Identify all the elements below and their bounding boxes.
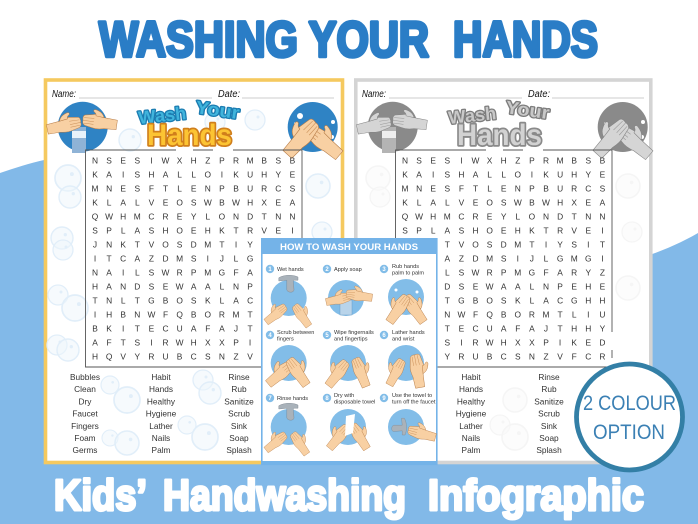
panel: how to wash your hands <box>261 238 438 465</box>
grey name and date line <box>362 89 644 100</box>
step 4: scrub between fingers: Scrub between <box>277 330 314 336</box>
grey word list: Splash <box>536 445 562 455</box>
word search letters: SPLASHOEHKTRVEI <box>92 226 294 236</box>
logo: wash your hands <box>137 97 241 152</box>
word list: Scrub <box>228 409 250 419</box>
word search letters: AFTSIRWHXXPIKED <box>92 338 295 348</box>
grey word search letters: MNESFTLENPBURCS <box>402 184 606 194</box>
grey logo: wash your hands <box>447 97 551 152</box>
step 1: wet hands: 1 <box>268 267 272 273</box>
grey icon: hands with soap cup <box>355 102 428 153</box>
word search letters: JNKTVOSDMTIYSIT <box>93 240 295 250</box>
step 5: wipe fingernails and fingertips: Wipe fingernails <box>334 330 374 336</box>
word search letters: IHBNWFQBORMTLIU <box>94 310 295 320</box>
step 4: scrub between fingers <box>261 330 316 389</box>
grey icon: hands rubbing <box>586 102 659 161</box>
grey word search letters: IHBNWFQBORMTLIU <box>404 310 605 320</box>
word search letters: MNESFTLENPBURCS <box>92 184 296 194</box>
step 9: use the towel to turn off the faucet: 9 <box>382 396 386 402</box>
grey word search letters: HQVYRUBCSNZVFCR <box>402 352 605 362</box>
background bubbles <box>47 110 332 455</box>
title: WASHING YOUR <box>99 12 429 68</box>
word search frame <box>86 150 302 367</box>
grey word list: Habit <box>461 372 481 382</box>
step 4: scrub between fingers: 4 <box>268 333 272 339</box>
icon: hands with soap cup <box>45 102 118 153</box>
step 3: rub hands palm to palm: Rub hands <box>392 264 419 270</box>
word list: Nails <box>152 433 170 443</box>
word search letters: QWHMCREYLONDTNN <box>92 212 295 222</box>
word search letters: BKITECUAFAJTHHY <box>92 324 296 334</box>
step 3: rub hands palm to palm: palm to palm <box>392 270 424 276</box>
step 3: rub hands palm to palm: 3 <box>382 267 386 273</box>
word search letters: NSESIWXHZPRMBSB <box>92 156 296 166</box>
grey word search letters: NAILSWRPMGFARYZ <box>402 268 605 278</box>
grey word search letters: TNLTGBOSKLACGHH <box>402 296 605 306</box>
grey word search letters: HANDSEWAALNPEHE <box>402 282 606 292</box>
panel: greyscale word search <box>355 80 659 462</box>
callout: 2 colour option: OPTION <box>593 421 665 444</box>
word search letters: NAILSWRPMGFARYZ <box>92 268 295 278</box>
grey word search letters <box>402 156 606 362</box>
word search letters: KAISHALLOIKUHYE <box>92 170 296 180</box>
grey word list: Rub <box>541 384 557 394</box>
grey word list: Healthy <box>457 396 486 406</box>
step 8: dry with disposable towel: disposable towel <box>334 400 375 406</box>
grey word search letters: JNKTVOSDMTIYSIT <box>403 240 605 250</box>
word list: Faucet <box>72 409 98 419</box>
step 3: rub hands palm to palm <box>380 264 433 326</box>
grey word search letters: KAISHALLOIKUHYE <box>402 170 606 180</box>
word list: Lather <box>149 421 173 431</box>
word list: Rinse <box>228 372 250 382</box>
grey word search letters: NSESIWXHZPRMBSB <box>402 156 606 166</box>
grey logo: wash your hands: Your <box>504 97 551 123</box>
word list: Hygiene <box>146 409 177 419</box>
word list: Foam <box>74 433 96 443</box>
grey word list: Nails <box>462 433 480 443</box>
step 8: dry with disposable towel: 8 <box>325 396 329 402</box>
grey word search letters: QWHMCREYLONDTNN <box>402 212 605 222</box>
step 4: scrub between fingers: fingers <box>277 336 294 342</box>
step 6: lather hands and wrist <box>380 330 432 389</box>
grey word list: Palm <box>462 445 481 455</box>
word list: Habit <box>151 372 171 382</box>
grey logo: wash your hands: Wash <box>447 103 497 128</box>
step 6: lather hands and wrist: 6 <box>382 333 386 339</box>
step 6: lather hands and wrist: and wrist <box>392 336 415 342</box>
step 9: use the towel to turn off the faucet: Use the towel to <box>392 393 432 399</box>
grey word list: Sanitize <box>534 396 564 406</box>
name and date line: Date: <box>218 89 240 100</box>
word list: Dry <box>79 396 92 406</box>
logo: wash your hands: Your <box>194 97 241 123</box>
word search letters: HANDSEWAALNPEHE <box>92 282 296 292</box>
step 6: lather hands and wrist: Lather hands <box>392 330 425 336</box>
logo: wash your hands: Wash <box>137 103 187 128</box>
word search letters: KLALVEOSWBWHXEA <box>92 198 296 208</box>
grey name and date line: Name: <box>362 89 386 100</box>
grey word search letters: AFTSIRWHXXPIKED <box>402 338 605 348</box>
step 2: apply soap: Apply soap <box>334 267 362 273</box>
grey word list: Soap <box>539 433 559 443</box>
word list: Germs <box>73 445 97 455</box>
background blue wave <box>0 157 698 524</box>
step 2: apply soap: 2 <box>325 267 329 273</box>
step 1: wet hands: Wet hands <box>277 267 304 273</box>
step 7: rinse hands: 7 <box>268 396 272 402</box>
word search letters: HQVYRUBCSNZVFCR <box>92 352 295 362</box>
word list: Healthy <box>147 396 176 406</box>
step 9: use the towel to turn off the faucet <box>380 393 438 445</box>
step 5: wipe fingernails and fingertips: and fingertips <box>334 336 368 342</box>
step 5: wipe fingernails and fingertips: 5 <box>325 333 329 339</box>
grey logo: wash your hands: Hands <box>457 119 542 152</box>
word list: Hands <box>149 384 173 394</box>
grey word search frame <box>396 150 612 367</box>
step 9: use the towel to turn off the faucet: turn off the faucet <box>392 400 436 406</box>
bottom title: Infographic <box>428 471 644 520</box>
bottom title: Handwashing <box>163 471 406 520</box>
word list: Clean <box>74 384 96 394</box>
bottom title: Kids’ <box>54 471 147 520</box>
callout: 2 colour option <box>576 364 682 470</box>
step 8: dry with disposable towel: Dry with <box>334 393 354 399</box>
grey word list: Sink <box>541 421 558 431</box>
word list: Sanitize <box>224 396 254 406</box>
word search letters <box>92 156 296 362</box>
step 1: wet hands <box>261 265 316 329</box>
word list: Rub <box>231 384 247 394</box>
word list: Bubbles <box>70 372 100 382</box>
grey word list: Lather <box>459 421 483 431</box>
step 2: apply soap <box>323 265 373 316</box>
grey background bubbles <box>366 166 642 450</box>
word list: Sink <box>231 421 248 431</box>
name and date line: Name: <box>52 89 76 100</box>
grey word search letters: ITCAZDMSIJLGMGI <box>404 254 604 264</box>
word list <box>70 372 254 455</box>
grey word list <box>456 372 564 455</box>
grey word search letters: BKITECUAFAJTHHY <box>402 324 606 334</box>
title: HANDS <box>453 12 598 68</box>
step 7: rinse hands <box>261 394 314 457</box>
name and date line <box>52 89 334 100</box>
logo: wash your hands: Hands <box>147 119 232 152</box>
panel heading: HOW TO WASH YOUR HANDS <box>280 242 418 253</box>
word search letters: ITCAZDMSIJLGMGI <box>94 254 294 264</box>
panel: colour word search <box>45 80 349 462</box>
step 7: rinse hands: Rinse hands <box>277 396 308 402</box>
step 8: dry with disposable towel <box>322 393 376 452</box>
word list: Splash <box>226 445 252 455</box>
icon: hands rubbing <box>276 102 349 161</box>
callout: 2 colour option: 2 COLOUR <box>583 392 676 415</box>
grey word search letters: KLALVEOSWBWHXEA <box>402 198 606 208</box>
grey word list: Hands <box>459 384 483 394</box>
grey name and date line: Date: <box>528 89 550 100</box>
bottom title <box>54 471 644 520</box>
word list: Soap <box>229 433 249 443</box>
grey word search letters: SPLASHOEHKTRVEI <box>402 226 604 236</box>
grey word list: Hygiene <box>456 409 487 419</box>
step 5: wipe fingernails and fingertips <box>320 330 376 389</box>
word list: Palm <box>152 445 171 455</box>
grey word list: Scrub <box>538 409 560 419</box>
grey word list: Rinse <box>538 372 560 382</box>
word list: Fingers <box>71 421 99 431</box>
word search letters: TNLTGBOSKLACGHH <box>92 296 295 306</box>
